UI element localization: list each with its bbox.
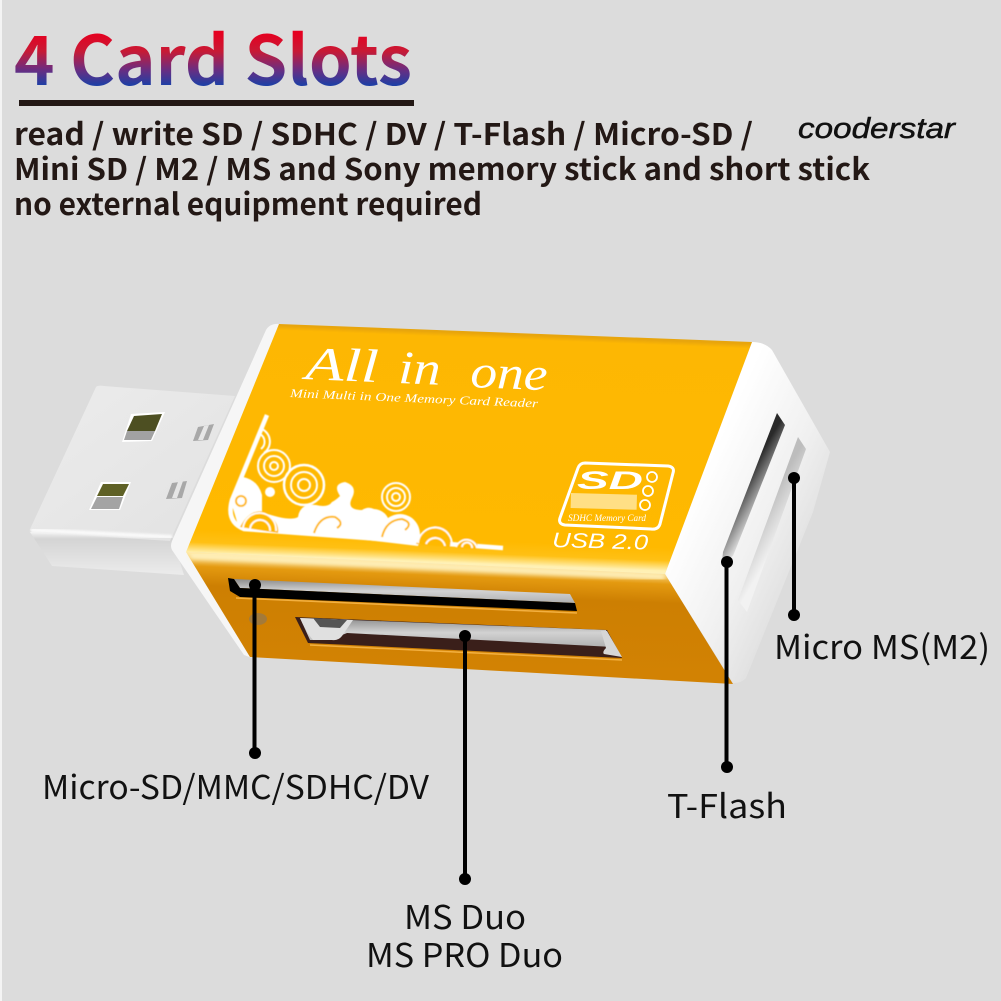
swirl ornament [230, 415, 503, 549]
description text [14, 110, 870, 224]
front orange face [186, 552, 733, 684]
description text: Mini SD / M2 / MS and Sony memory stick and short stick [14, 145, 870, 189]
callout: Micro MS line [788, 472, 800, 621]
screw mark [249, 613, 267, 625]
slot: Micro MS on end cap [738, 437, 806, 612]
USB plug [30, 386, 235, 575]
callout: Micro-SD line [249, 579, 261, 759]
USB small contact upper [193, 424, 214, 441]
slot: MS Duo [295, 617, 622, 660]
label: MS Duo: MS Duo [404, 891, 526, 939]
SD logo: SD [577, 467, 643, 495]
label: MS Duo [366, 891, 563, 977]
slot: Micro-SD [228, 578, 577, 613]
USB small contact lower [166, 481, 187, 499]
label: MS Duo: MS PRO Duo [366, 929, 563, 977]
USB 2.0 label: USB 2.0 [552, 529, 649, 555]
brand lettering: Mini Multi in One Memory Card Reader [289, 386, 539, 410]
USB hole upper [122, 412, 165, 442]
top orange face [186, 324, 752, 574]
ridge highlight [190, 556, 665, 577]
callout: MS Duo line [459, 630, 471, 885]
card reader device [30, 324, 830, 684]
white right end cap [665, 342, 830, 683]
USB hole lower [89, 482, 131, 510]
slot: T-Flash on end cap [722, 413, 785, 562]
description text: no external equipment required [14, 180, 482, 224]
label: Micro-SD/MMC/SDHC/DV: Micro-SD/MMC/SDHC/DV [42, 761, 429, 809]
description text: read / write SD / SDHC / DV / T-Flash / Micro-SD / [14, 110, 753, 154]
brand lettering: one [470, 346, 549, 401]
brand lettering: All [301, 338, 380, 393]
brand lettering: in [398, 342, 442, 396]
SD logo: SDHC Memory Card [568, 513, 647, 523]
label: T-Flash: T-Flash [667, 780, 787, 828]
callout: T-Flash line [721, 556, 733, 773]
label: Micro MS(M2): Micro MS(M2) [774, 621, 990, 669]
brand lettering [289, 338, 549, 410]
brand watermark: cooderstar [798, 113, 957, 145]
title: 4 Card Slots [14, 6, 412, 105]
white left end cap [171, 324, 280, 658]
title underline [19, 100, 414, 106]
SD logo [560, 463, 673, 529]
